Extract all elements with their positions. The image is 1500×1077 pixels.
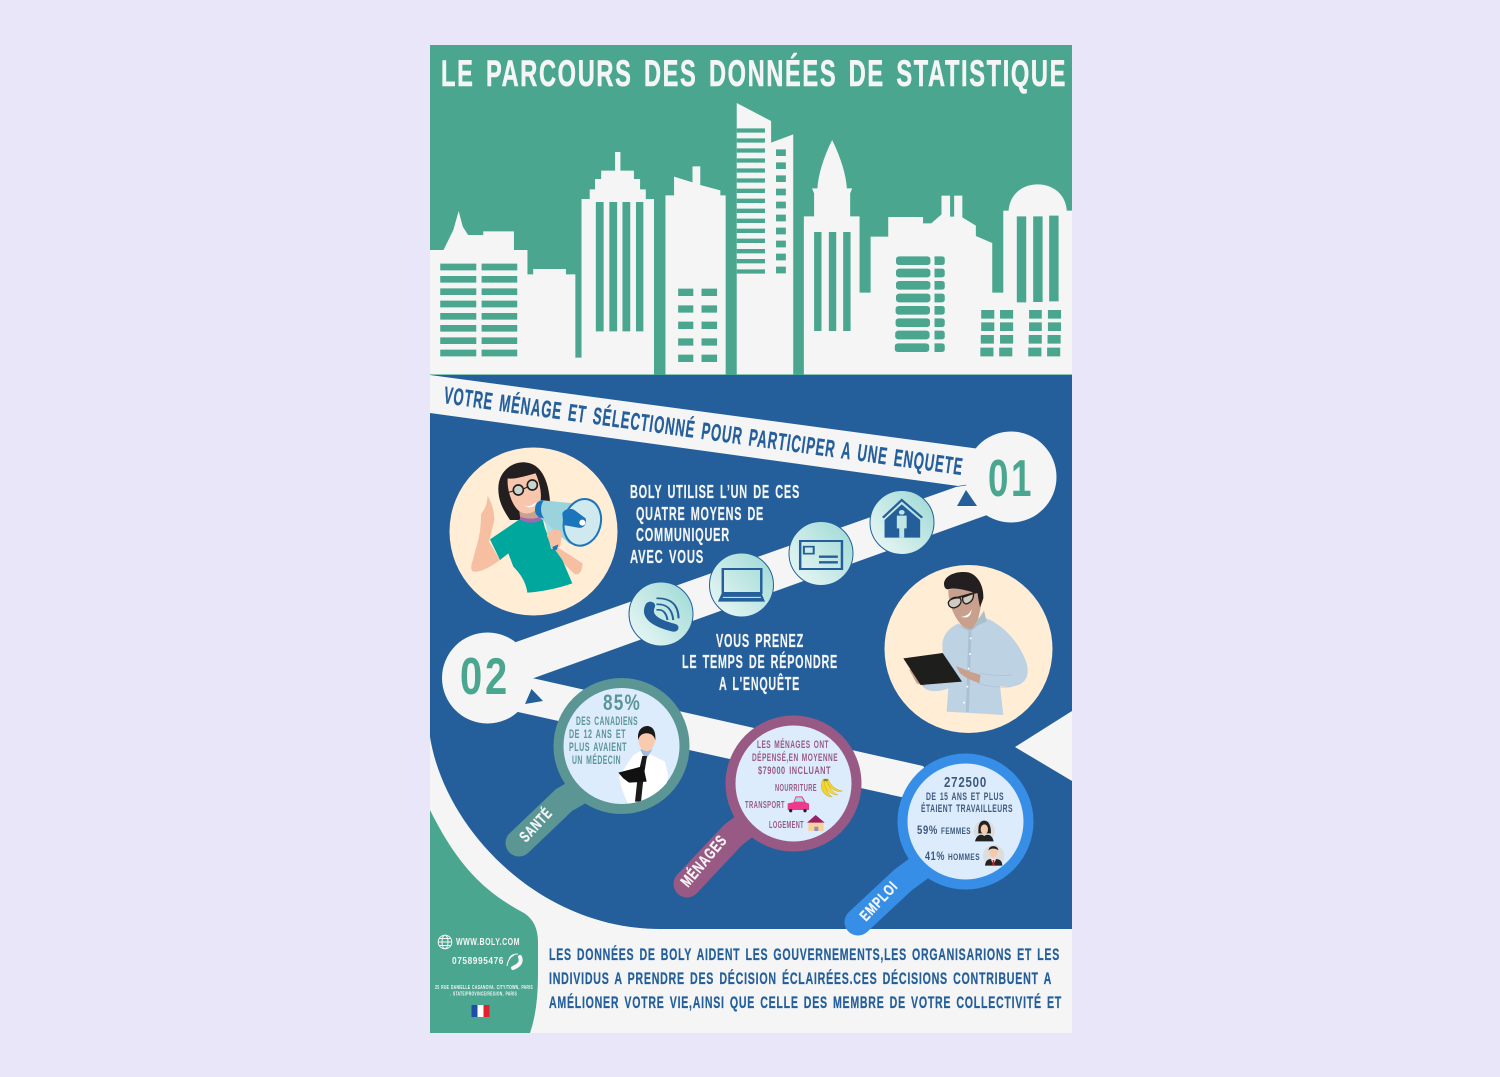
footer paragraph: INDIVIDUS A PRENDRE DES DÉCISION ÉCLAIRÉES.CES DÉCISIONS CONTRIBUENT A	[549, 969, 1052, 988]
description: DE 12 ANS ET	[569, 729, 626, 741]
text: four ways: COMMUNIQUER	[636, 525, 730, 545]
description: $79000 INCLUANT	[758, 765, 831, 777]
arrow tip	[525, 689, 543, 704]
blue panel	[430, 375, 1072, 929]
illustration: woman with megaphone	[450, 448, 618, 616]
path band step 1	[430, 375, 1016, 486]
description: LES MÉNAGES ONT	[757, 738, 829, 751]
arrow tip	[957, 490, 977, 506]
description: ÉTAIENT TRAVAILLEURS	[921, 802, 1013, 815]
text: take the time: A L'ENQUÊTE	[719, 673, 800, 694]
skyline	[430, 103, 1072, 374]
stat: 272500	[944, 774, 987, 791]
magnifier: emploi	[856, 758, 1028, 925]
text: take the time: VOUS PRENEZ	[716, 631, 804, 651]
description: LOGEMENT	[769, 820, 804, 831]
header panel	[430, 45, 1072, 375]
description	[917, 791, 1013, 863]
icon: woman	[974, 820, 995, 842]
icon: laptop	[710, 553, 774, 617]
badge 02	[442, 632, 543, 724]
address: 25 RUE DANIELLE CASANOVA. CITY/TOWN, PARIS	[435, 985, 533, 991]
band heading: VOTRE MÉNAGE ET SÉLECTIONNÉ POUR PARTICIPER A UNE ENQUETE	[442, 381, 965, 481]
description	[569, 716, 638, 767]
description: HOMMES	[948, 852, 980, 863]
address: . STATE/PROVINCE/REGION, PARIS	[450, 992, 517, 998]
handle label: EMPLOI	[856, 878, 902, 925]
number 02: 02	[460, 648, 510, 706]
website: WWW.BOLY.COM	[456, 937, 520, 948]
handle	[687, 822, 750, 884]
title: LE PARCOURS DES DONNÉES DE STATISTIQUE	[441, 53, 1067, 94]
icon: postcard	[789, 522, 853, 586]
description: FEMMES	[941, 826, 971, 837]
magnifier: santé	[516, 683, 684, 846]
icon: globe	[438, 935, 452, 949]
icon: french flag	[472, 1005, 490, 1017]
handle	[519, 792, 578, 843]
handle	[858, 866, 922, 922]
icon: house	[807, 815, 825, 831]
handle label: SANTÉ	[516, 805, 556, 846]
text: take the time: LE TEMPS DE RÉPONDRE	[682, 651, 838, 672]
icon: man	[983, 845, 1004, 866]
description: NOURRITURE	[775, 783, 817, 794]
icon: car	[788, 796, 809, 812]
description: 59%	[917, 825, 938, 837]
description	[745, 738, 838, 831]
description: UN MÉDECIN	[572, 754, 621, 767]
description: TRANSPORT	[745, 800, 785, 811]
number 01: 01	[988, 450, 1034, 508]
text: four ways: AVEC VOUS	[630, 547, 704, 567]
icon: bananas	[821, 779, 842, 797]
stat: 85%	[603, 690, 641, 715]
path band step 2	[487, 480, 1000, 690]
text: take the time	[682, 631, 838, 694]
phone number: 0758995476	[452, 956, 504, 967]
path band step 3	[487, 678, 950, 800]
icon: phone	[507, 954, 521, 968]
footer paragraph: LES DONNÉES DE BOLY AIDENT LES GOUVERNEMENTS,LES ORGANISARIONS ET LES	[549, 945, 1060, 964]
text: four ways: BOLY UTILISE L’UN DE CES	[630, 482, 800, 502]
footer paragraph: AMÉLIONER VOTRE VIE,AINSI QUE CELLE DES MEMBRE DE VOTRE COLLECTIVITÉ ET	[549, 993, 1062, 1012]
icon: house	[870, 490, 934, 554]
footer paragraph	[549, 945, 1062, 1012]
doctor	[618, 726, 668, 805]
address	[435, 985, 533, 998]
description: PLUS AVAIENT	[569, 742, 627, 754]
handle label: MÉNAGES	[677, 831, 731, 891]
right arrow notch	[1015, 711, 1072, 781]
text: four ways: QUATRE MOYENS DE	[636, 504, 764, 524]
text: four ways	[630, 482, 800, 567]
footer contact panel	[430, 810, 538, 1033]
icon: phone	[629, 582, 693, 646]
description: DÉPENSÉ,EN MOYENNE	[752, 751, 838, 764]
poster sheet	[430, 45, 1072, 1033]
badge 01	[957, 432, 1056, 522]
description: DE 15 ANS ET PLUS	[926, 791, 1004, 803]
description: 41%	[925, 851, 945, 863]
description: DES CANADIENS	[576, 716, 638, 728]
magnifier: ménages	[677, 720, 856, 891]
illustration: man with tablet	[884, 565, 1052, 733]
